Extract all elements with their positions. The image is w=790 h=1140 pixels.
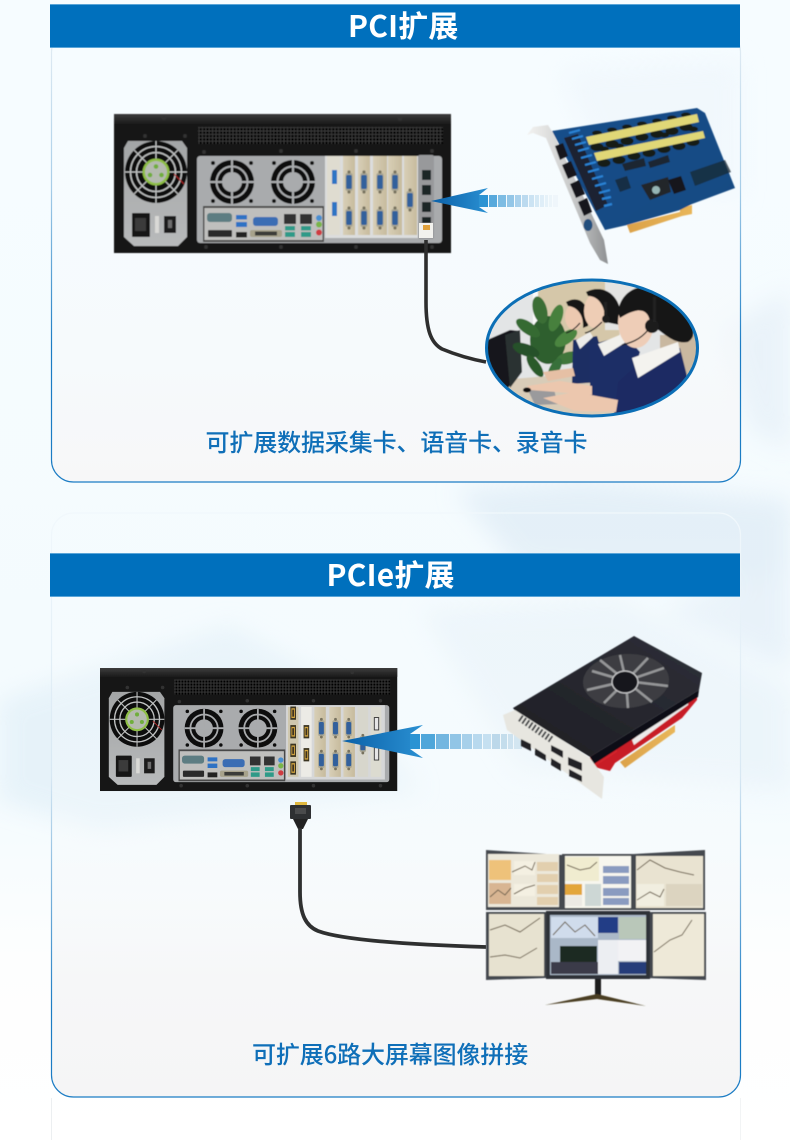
cable 1 [426, 240, 486, 362]
heading: PCIe扩展 [50, 553, 740, 597]
heading: PCI扩展 [50, 4, 740, 48]
pci card [527, 108, 735, 264]
monitor wall [486, 850, 706, 1006]
rj block [564, 134, 608, 211]
heading: PCI扩展: PCI扩展 [348, 2, 459, 46]
dvi connector [290, 802, 311, 829]
chassis 2 [100, 668, 397, 791]
rj45 plug [419, 223, 433, 238]
transformer rows [586, 114, 705, 161]
arrow 1 [431, 188, 558, 213]
bracket [527, 125, 608, 264]
chassis 1 [114, 114, 451, 253]
graphics card [503, 636, 702, 799]
heading: PCIe扩展: PCIe扩展 [326, 551, 455, 595]
caption: panel 1: 可扩展数据采集卡、语音卡、录音卡 [206, 423, 587, 458]
call center photo [486, 279, 700, 420]
artwork: panel 1 and panel 2 illustrations [100, 107, 736, 1006]
cable 2 [300, 828, 486, 947]
arrow 2 [342, 725, 522, 758]
caption: panel 2: 可扩展6路大屏幕图像拼接 [252, 1035, 528, 1070]
chips [641, 177, 671, 200]
